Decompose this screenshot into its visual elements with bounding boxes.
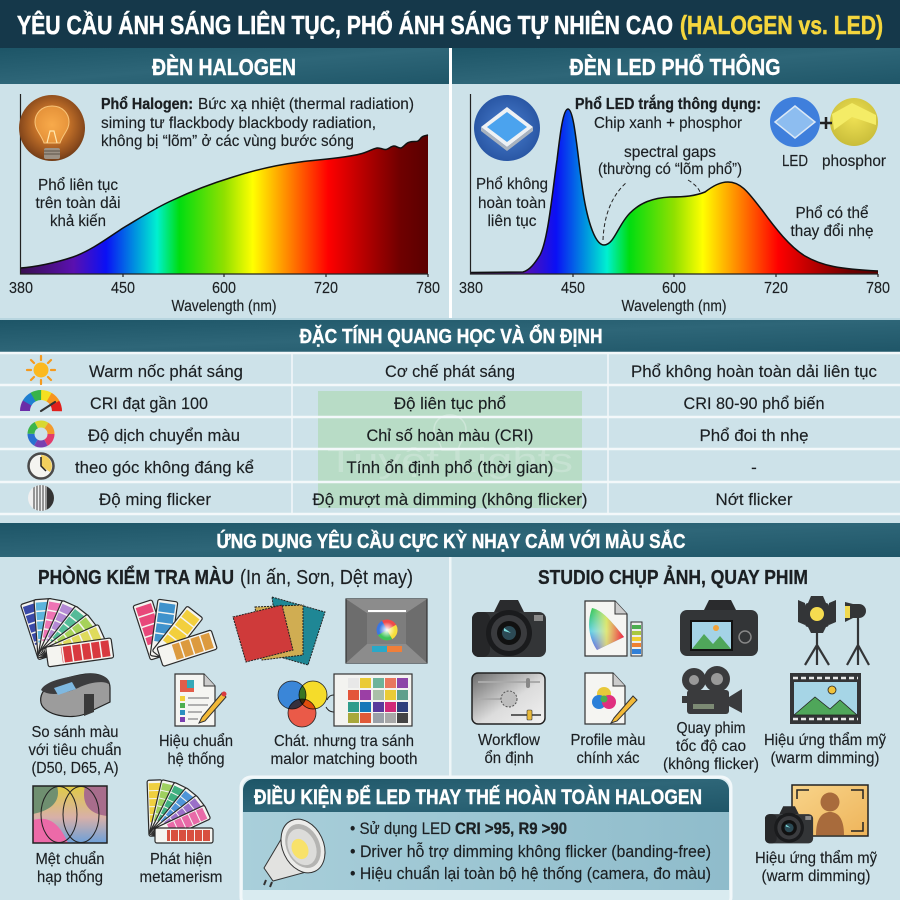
text: compare with standard: với tiêu chuẩn [28, 741, 122, 759]
heading: halogen: ĐÈN HALOGEN [152, 53, 296, 80]
text: may vary slightly [790, 204, 874, 240]
chart: LED spectrum [459, 94, 890, 315]
column: halogen values: CRI đạt gần 100 [90, 394, 208, 413]
icon: sun [27, 356, 55, 384]
text: matching booth: malor matching booth [270, 751, 418, 768]
icon: MR16 LED bulb [264, 812, 333, 887]
title bar: YÊU CẦU ÁNH SÁNG LIÊN TỤC, PHỔ ÁNH SÁNG TỰ NHIÊN CAO [17, 10, 673, 40]
icon: CRI gauge [25, 395, 57, 427]
text: detect metamerism: metamerism [140, 869, 222, 886]
text: stable workflow: ổn định [484, 749, 534, 767]
column: criteria: Độ mượt mà dimming (không flicker) [312, 490, 588, 509]
heading: color inspection: PHÒNG KIỂM TRA MÀU [38, 565, 234, 589]
icon: fabric samples [233, 597, 325, 665]
text: halogen description [101, 95, 414, 150]
column: criteria [312, 362, 588, 509]
text: conditions list: • Hiệu chuẩn lại toàn bộ hệ thống (camera, đo màu) [350, 864, 711, 883]
text: compare with standard: So sánh màu [32, 724, 118, 741]
text: matching booth: Chát. nhưng tra sánh [274, 733, 414, 750]
watermark: Tuyệt Lights [327, 442, 573, 480]
text: matching booth [270, 733, 418, 768]
text: detect metamerism: Phát hiện [150, 851, 212, 868]
title bar [0, 0, 900, 48]
panel: LED [452, 48, 900, 315]
text: not fully continuous: Phổ không [476, 175, 548, 193]
column: LED values: - [751, 458, 757, 477]
text: standard system: hạp thống [37, 869, 103, 886]
column: criteria: Độ liên tục phổ [394, 394, 506, 413]
icon: color wheel [31, 424, 51, 444]
chart: LED spectrum: 450 [561, 280, 585, 297]
icon: LED plus phosphor: LED [782, 153, 808, 170]
heading: optical properties: ĐẶC TÍNH QUANG HỌC VÀ ỔN ĐỊNH [300, 324, 602, 348]
column: criteria: Chỉ số hoàn màu (CRI) [366, 426, 534, 445]
icon: LED plus phosphor [770, 97, 887, 170]
heading: color inspection: (In ấn, Sơn, Dệt may) [240, 567, 413, 589]
chart: halogen spectrum: 450 [111, 280, 135, 297]
chart: halogen spectrum: Wavelength (nm) [172, 298, 276, 315]
chart: halogen spectrum: 720 [314, 280, 338, 297]
icon: spectrophotometer [41, 674, 110, 717]
text: aesthetic effect: Hiệu ứng thẩm mỹ [764, 731, 886, 749]
text: continuous spectrum note: khả kiến [50, 213, 106, 230]
icon: viewing booth [346, 599, 427, 663]
column: LED values: Nớt flicker [716, 490, 793, 509]
icon: flicker [28, 485, 54, 511]
column: halogen values: Độ ming flicker [99, 490, 211, 509]
chart: LED spectrum: 720 [764, 280, 788, 297]
icon: clock [28, 454, 54, 478]
column: halogen values [75, 362, 254, 509]
text: continuous spectrum note: trên toàn dải [36, 195, 120, 212]
text: halogen description: Phổ Halogen: [101, 95, 193, 113]
chart: LED spectrum: Wavelength (nm) [622, 298, 726, 315]
chart: LED spectrum: 380 [459, 280, 483, 297]
icon: DSLR front [472, 600, 546, 657]
icon: DSLR back [680, 600, 758, 656]
text: aesthetic effect lower: Hiệu ứng thẩm mỹ [755, 849, 877, 867]
table: optical properties [0, 353, 900, 514]
chart: halogen spectrum: 380 [9, 280, 33, 297]
icon: LED plus phosphor: phosphor [822, 153, 887, 170]
text: LED description [575, 94, 761, 132]
text: aesthetic effect lower [755, 849, 877, 885]
column: LED values: Phổ không hoàn toàn dải liên tục [631, 362, 877, 381]
icon: swatch fan small [133, 599, 217, 667]
text: compare with standard [28, 724, 122, 777]
callout: spectral gaps [598, 144, 742, 240]
text: not fully continuous [476, 175, 548, 230]
text: LED description: Phổ LED trắng thông dụng: [575, 94, 761, 113]
text: high speed filming: Quay phim [676, 720, 746, 737]
icon: color profile document [585, 673, 637, 724]
icon: studio lights [798, 596, 869, 665]
callout: LED replacement conditions [241, 777, 731, 900]
column: LED values: CRI 80-90 phổ biến [684, 394, 824, 413]
icon: swatch fan large [21, 598, 114, 667]
text: not fully continuous: hoàn toàn [478, 195, 546, 212]
text: standard system: Mệt chuẩn [36, 850, 104, 868]
text: may vary slightly: thay đổi nhẹ [790, 222, 874, 240]
icon: calibration document [175, 674, 226, 726]
heading: color inspection [38, 565, 413, 589]
text: system calibration: Hiệu chuẩn [159, 732, 233, 750]
icon: color matching chart [278, 674, 412, 727]
text: accurate profile: chính xác [576, 750, 640, 767]
text: may vary slightly: Phổ có thể [796, 204, 869, 222]
callout: spectral gaps: spectral gaps [624, 144, 716, 161]
callout: spectral gaps: (thường có “lõm phổ”) [598, 160, 742, 178]
text: conditions list: • Driver hỗ trợ dimming không flicker (banding-free) [350, 842, 711, 861]
text: LED description: Chip xanh + phosphor [594, 115, 743, 132]
text: conditions list [350, 819, 711, 883]
text: detect metamerism [140, 851, 222, 886]
column: LED values: Phổ đoi th nhẹ [700, 426, 808, 445]
heading: applications: ỨNG DỤNG YÊU CẦU CỰC KỲ NHẠY CẢM VỚI MÀU SẮC [216, 529, 686, 553]
heading: applications [0, 523, 900, 557]
text: system calibration [159, 732, 233, 768]
text: system calibration: hệ thống [168, 751, 224, 768]
text: aesthetic effect lower: (warm dimming) [762, 868, 870, 885]
text: halogen description: không bị “lõm” ở các vùng bước sóng [101, 133, 354, 150]
watermark [318, 391, 582, 508]
icon: metamerism image [33, 786, 107, 843]
text: continuous spectrum note [36, 176, 120, 230]
text: aesthetic effect: (warm dimming) [770, 750, 880, 767]
text: stable workflow: Workflow [478, 732, 540, 749]
chart: LED spectrum: 600 [662, 280, 686, 297]
icon: glowing bulb [19, 95, 85, 161]
chart: halogen spectrum: 780 [416, 280, 440, 297]
icon: stable workflow sliders [472, 673, 545, 724]
column: halogen values: Độ dịch chuyển màu [88, 426, 240, 445]
column: halogen values: Warm nốc phát sáng [89, 362, 243, 381]
icon: cine camera [682, 666, 742, 714]
heading: conditions: ĐIỀU KIỆN ĐỂ LED THAY THẾ HOÀN TOÀN HALOGEN [254, 785, 702, 809]
icon: LED chip [474, 95, 540, 161]
text: high speed filming [663, 720, 759, 773]
text: high speed filming: tốc độ cao [676, 738, 746, 755]
heading: optical properties [0, 320, 900, 352]
text: standard system [36, 850, 104, 886]
text: halogen description: Bức xạ nhiệt (thermal radiation) [198, 96, 414, 113]
text: halogen description: siming tư flackbody blackbody radiation, [101, 115, 376, 132]
text: continuous spectrum note: Phổ liên tục [38, 176, 118, 194]
text: not fully continuous: liên tục [488, 213, 536, 230]
chart: halogen spectrum: 600 [212, 280, 236, 297]
text: accurate profile [570, 732, 646, 767]
heading: studio: STUDIO CHỤP ẢNH, QUAY PHIM [538, 566, 808, 589]
panel: halogen [0, 48, 449, 315]
column: criteria: Tính ổn định phổ (thời gian) [346, 458, 554, 477]
icon: portrait with camera [765, 785, 868, 843]
panel: color inspection room [21, 565, 427, 886]
text: aesthetic effect [764, 731, 886, 767]
text: conditions list: CRI >95, R9 >90 [455, 819, 567, 838]
chart: LED spectrum: 780 [866, 280, 890, 297]
column: halogen values: theo góc không đáng kể [75, 458, 254, 477]
icon: color gamut document [585, 601, 642, 656]
text: accurate profile: Profile màu [570, 732, 646, 749]
text: compare with standard: (D50, D65, A) [32, 760, 118, 777]
text: high speed filming: (không flicker) [663, 756, 759, 773]
text: conditions list: • Sử dụng LED [350, 819, 451, 838]
column: LED values [631, 362, 877, 509]
text: stable workflow [478, 732, 540, 767]
chart: halogen spectrum [9, 94, 440, 315]
heading: LED: ĐÈN LED PHỔ THÔNG [570, 53, 780, 80]
column: criteria: Cơ chế phát sáng [385, 362, 515, 381]
icon: swatch fan metamerism [147, 780, 213, 843]
icon: film frame [790, 673, 861, 724]
panel: photo and film studio [472, 566, 886, 885]
